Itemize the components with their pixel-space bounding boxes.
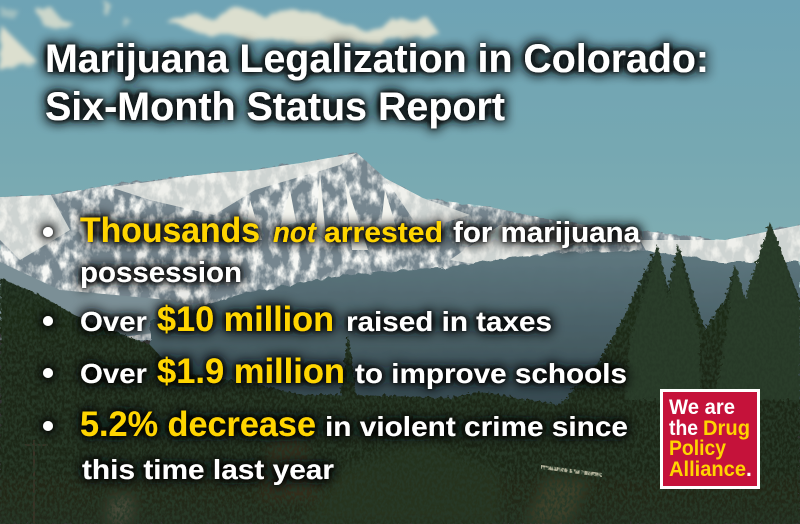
bullet 3 [43, 352, 627, 391]
logo: We are the Drug Policy Alliance: Policy [669, 437, 726, 460]
bullet 1 [43, 211, 641, 289]
logo: We are the Drug Policy Alliance: the [669, 417, 698, 440]
logo: We are the Drug Policy Alliance: Alliance [669, 458, 746, 481]
background: sky [0, 0, 800, 300]
bullet list [43, 211, 641, 485]
clouds [0, 0, 440, 70]
bullet 3: $1.9 million [157, 352, 345, 391]
road [541, 465, 602, 477]
bullet 1: possession [80, 257, 242, 289]
logo: We are the Drug Policy Alliance [660, 389, 760, 489]
bullet 4: 5.2% decrease [80, 405, 316, 444]
bullet 2: raised in taxes [346, 306, 552, 337]
title: Marijuana Legalization in Colorado: [45, 37, 709, 81]
title: Six-Month Status Report [45, 85, 505, 129]
bullet 2: $10 million [157, 300, 334, 339]
logo: We are the Drug Policy Alliance: We are [669, 396, 735, 419]
power pole [22, 440, 48, 524]
bullet 4 [43, 405, 628, 485]
title [45, 37, 709, 129]
bullet 3: Over [80, 358, 147, 389]
logo: We are the Drug Policy Alliance: . [746, 458, 752, 481]
forest [0, 220, 800, 524]
mountain range [0, 150, 800, 340]
bullet 1: for marijuana [453, 217, 641, 249]
bullet 2: Over [80, 306, 147, 337]
bullet 4: this time last year [82, 454, 334, 485]
bullet 1: arrested [324, 217, 443, 249]
bullet 1: not [273, 217, 317, 249]
bullet 4: in violent crime since [325, 411, 628, 442]
foothills [150, 250, 800, 410]
bullet 1: Thousands [80, 211, 260, 250]
logo: We are the Drug Policy Alliance: Drug [703, 417, 750, 440]
bullet 3: to improve schools [355, 358, 627, 389]
bullet 2 [43, 300, 552, 339]
